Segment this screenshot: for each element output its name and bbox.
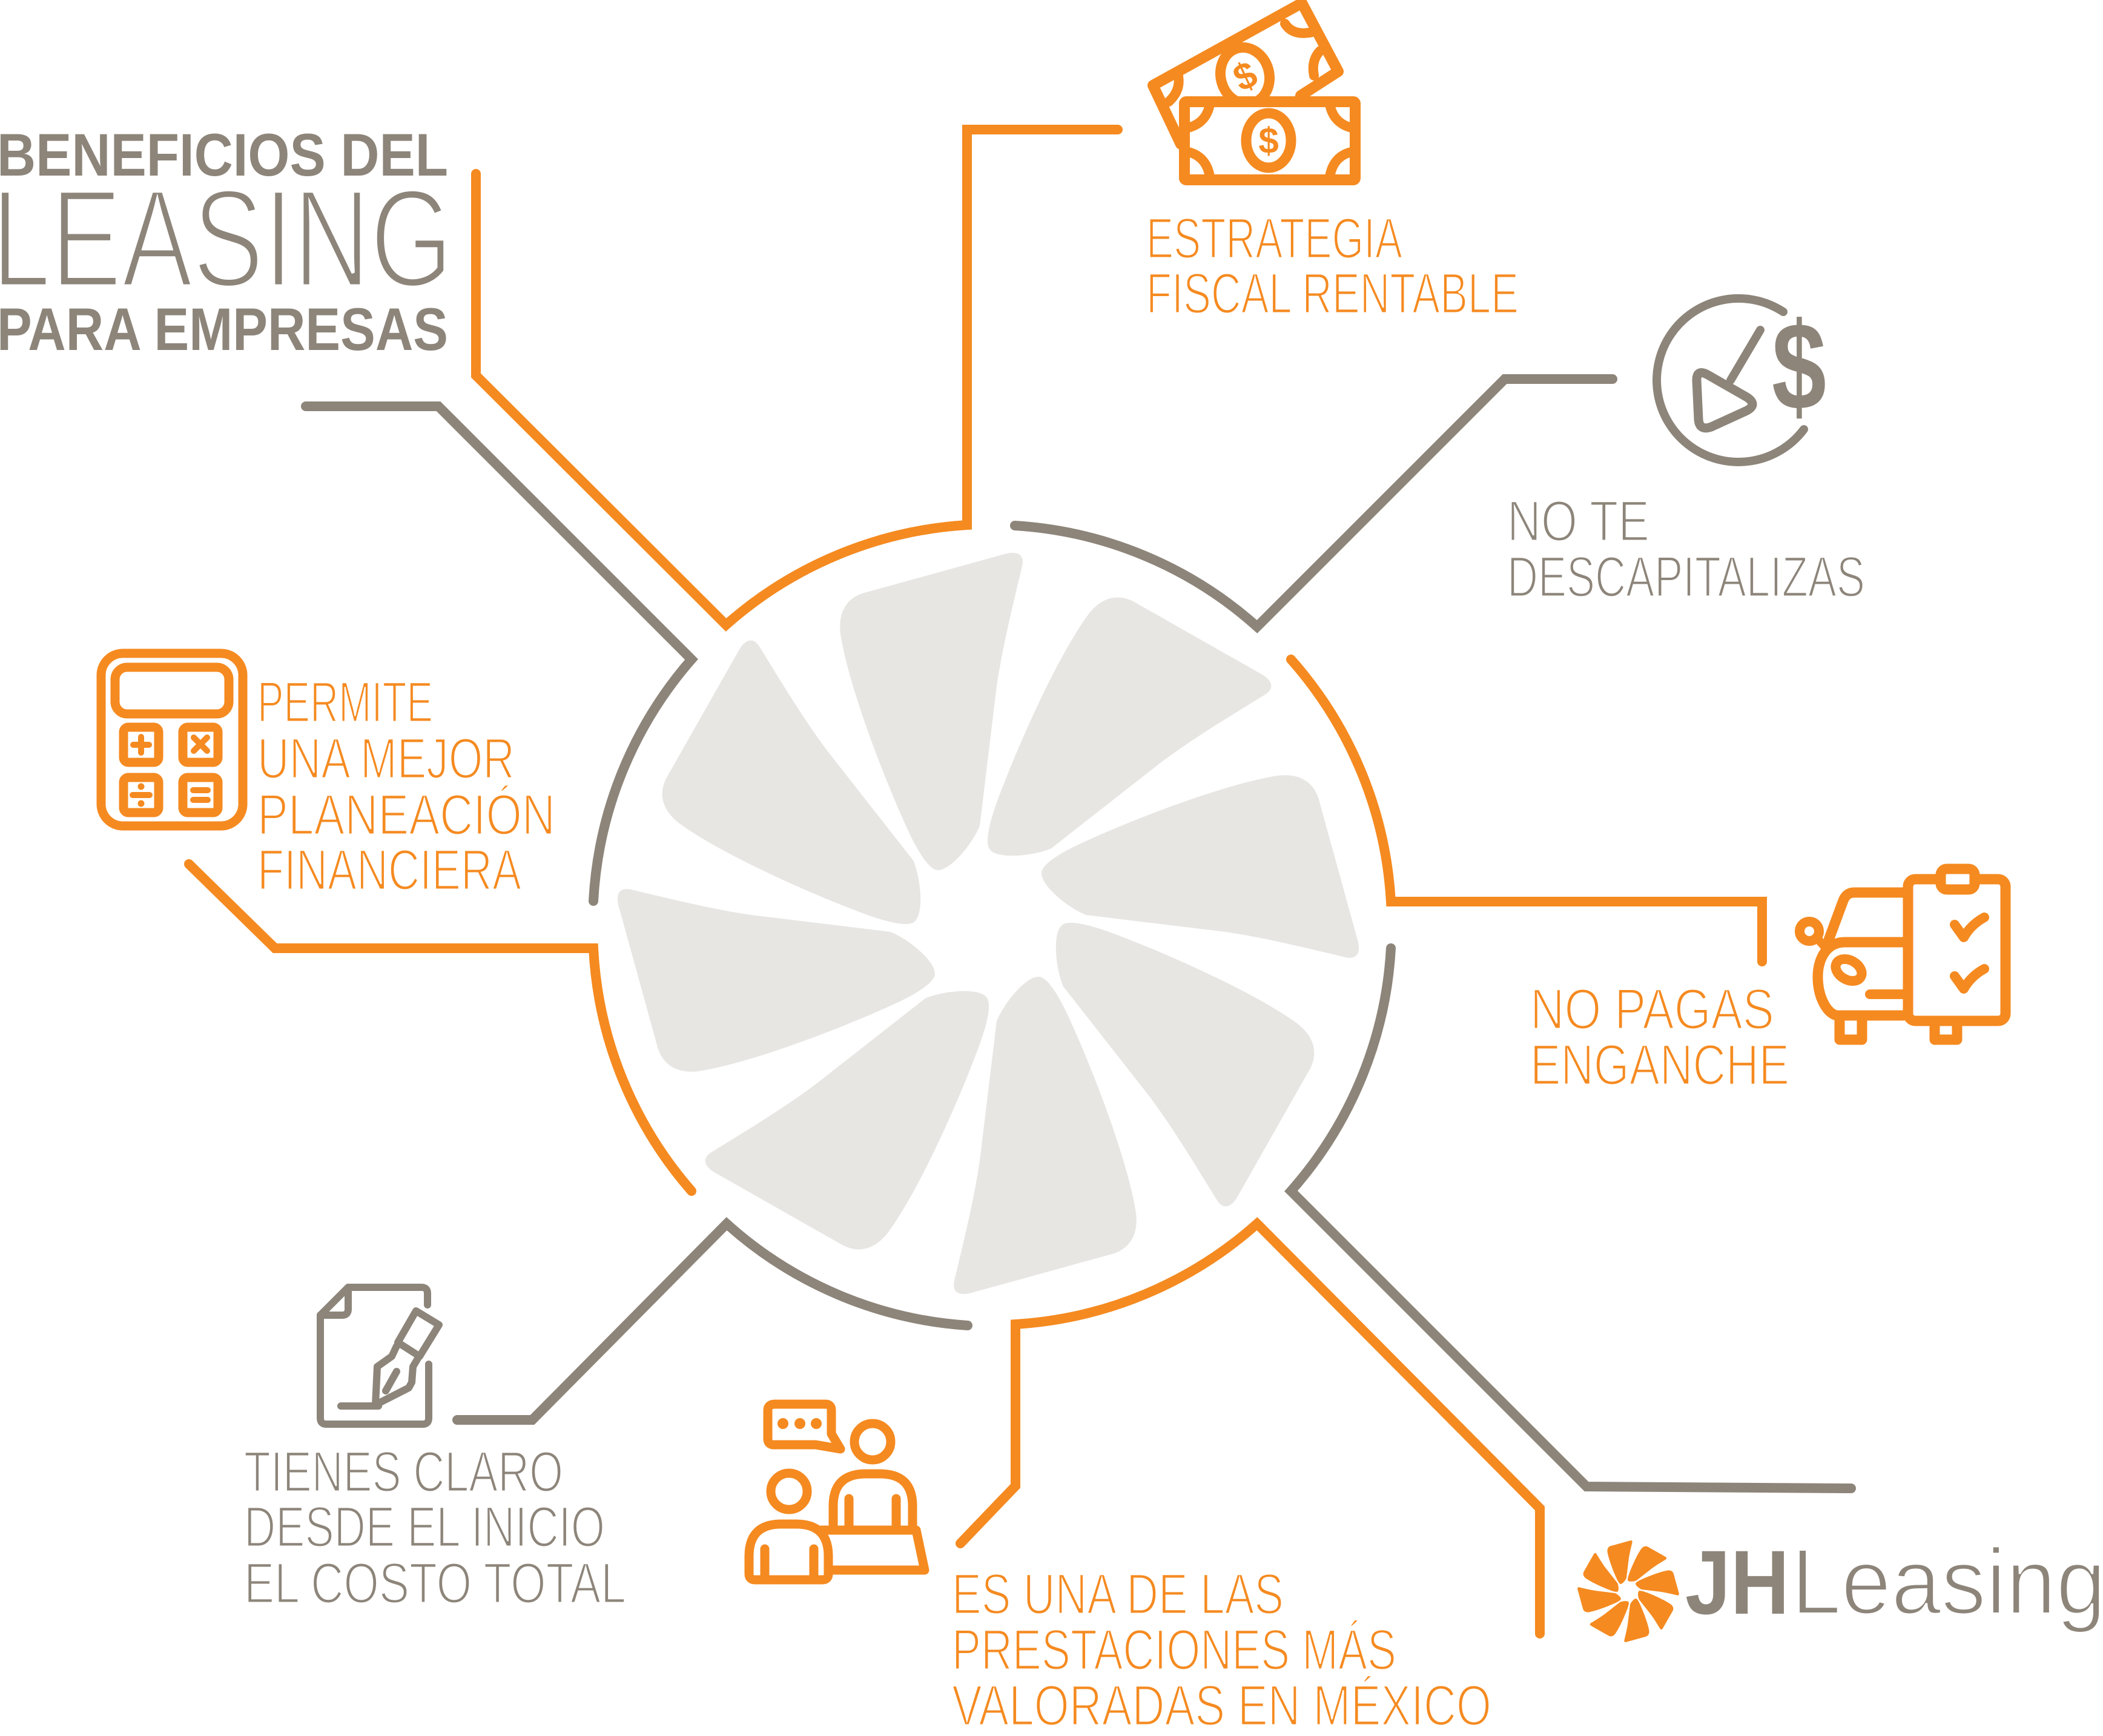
label: permite una mejor planeacion financiera: PERMITE <box>257 670 433 734</box>
label: no pagas enganche <box>1530 977 1789 1097</box>
connector: costo total <box>457 1224 968 1420</box>
central pinwheel <box>618 553 1359 1294</box>
icon: money bills: $ <box>1258 120 1279 161</box>
label: prestaciones mas valoradas: ES UNA DE LAS <box>952 1562 1284 1626</box>
label: permite una mejor planeacion financiera: FINANCIERA <box>257 838 521 902</box>
label: permite una mejor planeacion financiera: UNA MEJOR <box>257 727 515 791</box>
title: LEASING <box>0 160 453 316</box>
label: estrategia fiscal rentable: ESTRATEGIA <box>1146 206 1402 271</box>
icon: broom and dollar: $ <box>1772 297 1826 436</box>
icon: broom and dollar <box>1657 297 1826 462</box>
label: estrategia fiscal rentable <box>1146 206 1519 326</box>
icon: calculator <box>101 653 243 826</box>
title <box>0 121 453 363</box>
label: no te descapitalizas: NO TE <box>1507 489 1649 553</box>
title: PARA EMPRESAS <box>0 295 448 363</box>
label: no pagas enganche: NO PAGAS <box>1530 977 1774 1041</box>
icon: money bills <box>1153 3 1355 180</box>
label: permite una mejor planeacion financiera: PLANEACIÓN <box>257 783 555 847</box>
label: prestaciones mas valoradas <box>952 1562 1491 1736</box>
label: tienes claro el costo total: DESDE EL INICIO <box>244 1495 605 1559</box>
title: BENEFICIOS DEL <box>0 121 448 188</box>
label: prestaciones mas valoradas: PRESTACIONES MÁS <box>952 1618 1396 1682</box>
connector: title / fiscal strategy <box>476 130 1118 625</box>
icon: document and pen <box>320 1287 439 1424</box>
label: tienes claro el costo total <box>244 1440 626 1616</box>
logo flower mark <box>1577 1540 1679 1642</box>
label: tienes claro el costo total: EL COSTO TOTAL <box>244 1551 626 1616</box>
label: prestaciones mas valoradas: VALORADAS EN MÉXICO <box>952 1674 1491 1736</box>
connector: planeacion financiera <box>189 864 692 1191</box>
icon: meeting people <box>749 1404 925 1580</box>
connector: title grey <box>306 406 692 901</box>
label: estrategia fiscal rentable: FISCAL RENTABLE <box>1146 262 1519 326</box>
label: tienes claro el costo total: TIENES CLARO <box>244 1440 563 1504</box>
icon: money bills: $ <box>1227 53 1264 100</box>
connector: JH Leasing grey <box>1291 948 1851 1488</box>
connector: no descapitalizas <box>1015 379 1613 627</box>
label: no te descapitalizas <box>1507 489 1865 609</box>
label: no te descapitalizas: DESCAPITALIZAS <box>1507 545 1865 609</box>
connector: no pagas enganche <box>1291 659 1762 962</box>
label: permite una mejor planeacion financiera <box>257 670 555 902</box>
label: no pagas enganche: ENGANCHE <box>1530 1033 1789 1097</box>
logo wordmark: JH <box>1685 1531 1789 1633</box>
connector: prestaciones / logo <box>960 1224 1540 1634</box>
icon: car and clipboard <box>1800 869 2006 1040</box>
logo: JH Leasing <box>1577 1530 2103 1642</box>
